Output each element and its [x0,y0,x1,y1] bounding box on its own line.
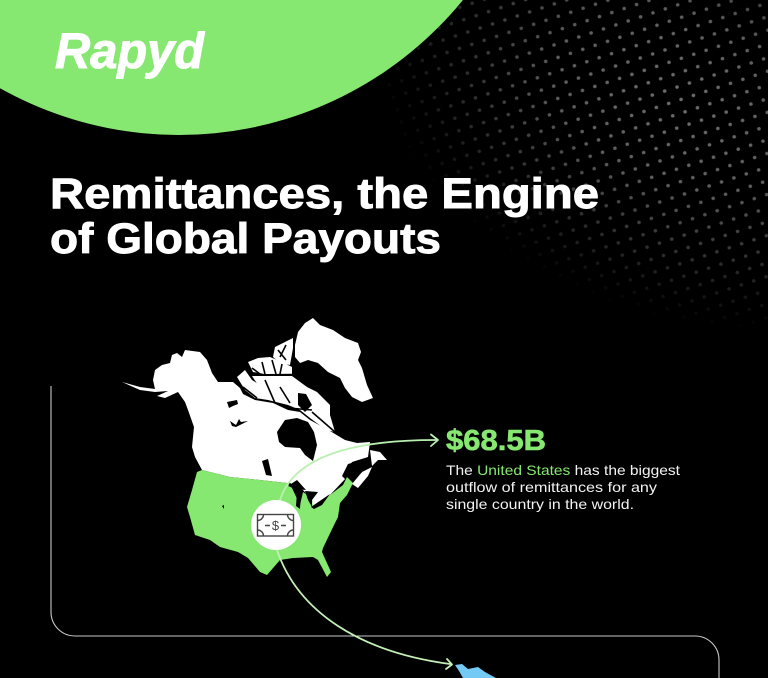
dotted pattern background [396,0,768,317]
Canada and Alaska [122,350,370,508]
stat: $68.5B: $68.5B [446,425,546,457]
Greenland [295,318,373,402]
Foxe Basin [298,393,312,412]
United States [187,470,353,577]
icon: banknote in circle: $ [272,518,280,533]
arrow to Mexico [277,550,452,669]
Great Lakes [222,480,330,509]
map: Mexico [455,664,496,678]
Newfoundland [370,450,387,466]
description text: outflow of remittances for any [446,479,657,495]
Rapyd logo: Rapyd [55,23,205,79]
arrow to $68.5B [280,434,438,500]
inland lakes [227,400,272,476]
title: of Global Payouts [50,215,441,263]
Arctic islands [237,338,335,432]
green header circle [0,0,545,135]
icon: banknote in circle [251,500,301,550]
map: North America [122,318,387,577]
Hudson Bay [277,418,317,461]
title [50,170,599,263]
Gulf of St Lawrence [342,460,366,484]
Maritimes [352,467,372,488]
title: Remittances, the Engine [50,170,599,218]
timeline frame line [51,386,719,678]
description text [446,462,680,512]
description text: single country in the world. [446,496,634,512]
description text: The United States has the biggest [446,462,680,478]
Arctic channels [243,345,335,432]
